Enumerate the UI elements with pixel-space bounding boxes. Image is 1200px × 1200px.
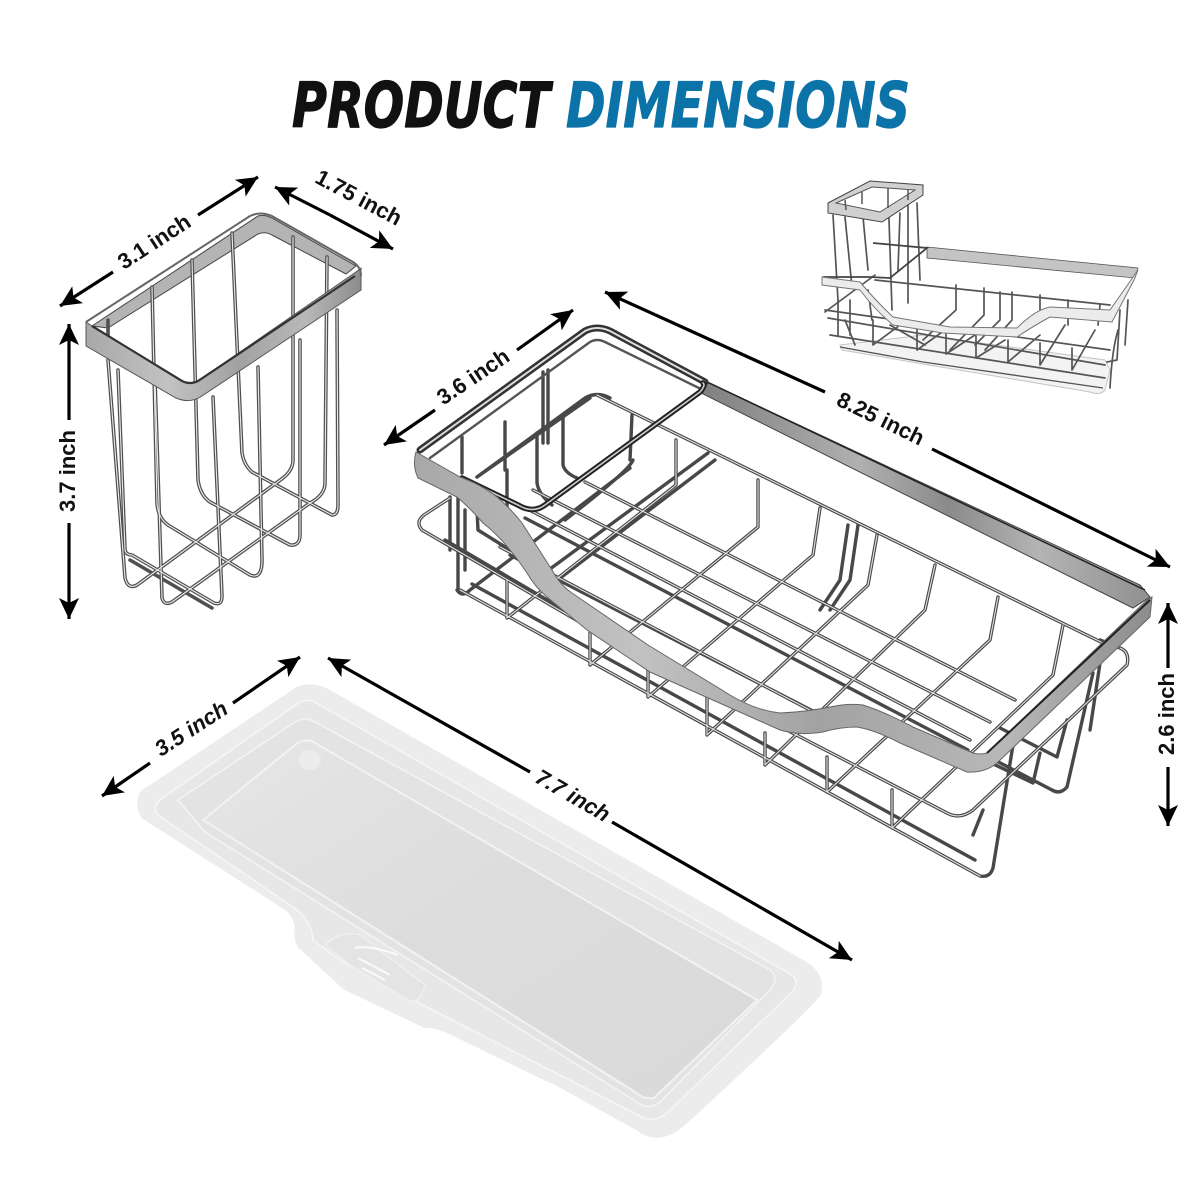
assembled product thumbnail xyxy=(822,181,1138,394)
back rim band xyxy=(703,380,1150,608)
dimension: 3.6 inch xyxy=(384,310,573,445)
dimension: 1.75 inch xyxy=(275,164,406,249)
large sink caddy basket xyxy=(414,328,1152,876)
dimension: 3.6 inch: 3.6 inch xyxy=(432,343,514,410)
title: PRODUCT xyxy=(292,69,554,142)
dimension: 3.7 inch: 3.7 inch xyxy=(55,430,80,512)
small sponge holder basket xyxy=(86,214,361,608)
dimension: 8.25 inch: 8.25 inch xyxy=(833,387,929,450)
dimension: 3.1 inch xyxy=(60,177,258,306)
lower wire frame xyxy=(419,370,1128,876)
left compartment rim xyxy=(420,328,705,510)
dimension: 3.1 inch: 3.1 inch xyxy=(113,209,195,274)
dimension: 2.6 inch: 2.6 inch xyxy=(1154,673,1179,755)
front S-curve band xyxy=(414,452,1152,772)
dimension: 8.25 inch xyxy=(605,292,1170,567)
dimension: 1.75 inch: 1.75 inch xyxy=(311,164,406,231)
title xyxy=(292,69,910,142)
drip tray xyxy=(137,684,822,1138)
dimension: 3.5 inch: 3.5 inch xyxy=(150,696,232,761)
title: DIMENSIONS xyxy=(566,69,910,142)
dimension: 3.5 inch xyxy=(102,657,300,796)
dimension: 7.7 inch xyxy=(328,658,852,960)
dimension: 7.7 inch: 7.7 inch xyxy=(531,764,615,827)
